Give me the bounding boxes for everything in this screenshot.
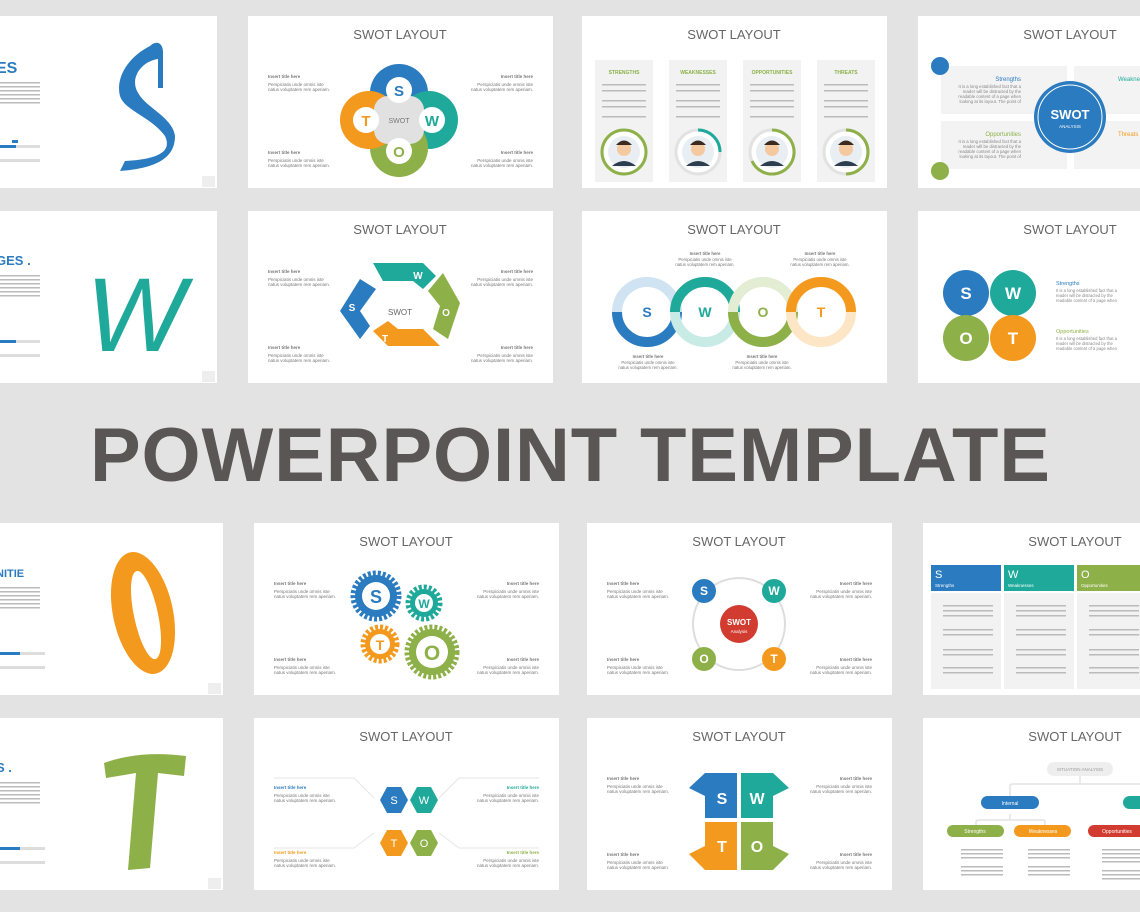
slide: four columns with avatars [582,16,887,188]
slide: hexagons: natus voluptatem rem aperiam. [274,798,336,803]
slide: wave circles: SWOT LAYOUT [687,222,781,237]
slide: W letter: W [86,257,194,374]
slide: circle with red center: S [700,584,708,598]
slide: arrow cycle: Perspiciatis unde omnis iste [477,353,533,358]
slide: hexagons: S [390,795,398,807]
slide: hexagons: natus voluptatem rem aperiam. [477,863,539,868]
slide: flower SWOT: O [393,144,405,161]
slide: SWOT analysis circle: SWOT [1050,107,1090,122]
slide: quadrant arrows: natus voluptatem rem aperiam. [607,865,669,870]
slide: four columns with avatars: SWOT LAYOUT [687,27,781,42]
slide: 2x2 circles: Strengths [1056,281,1080,287]
slide: flower SWOT: natus voluptatem rem aperiam. [268,163,330,168]
slide: flower SWOT: Perspiciatis unde omnis iste [477,82,533,87]
slide: SWOT analysis circle: reader will be distracted by the [963,144,1022,149]
slide: circle with red center: Insert title here [607,581,640,586]
slide: circle with red center: Perspiciatis unde omnis iste [816,665,872,670]
slide: circle with red center: SWOT LAYOUT [692,534,786,549]
slide: wave circles: W [698,304,712,320]
slide: org chart: Weaknesses [1029,829,1058,835]
slide: SWO table: W [1008,569,1019,581]
slide: four columns with avatars: THREATS [834,70,858,76]
slide: quadrant arrows: Insert title here [607,776,640,781]
slide: hexagons: Insert title here [507,850,539,855]
slide: 2x2 circles: O [959,329,973,348]
slide: circle with red center: Perspiciatis unde omnis iste [607,589,663,594]
slide: SWOT analysis circle: It is a long established fact that a [958,139,1022,144]
slide: circle with red center: Insert title here [607,657,640,662]
slide: arrow cycle: natus voluptatem rem aperiam. [268,282,330,287]
slide: circle with red center: T [770,652,778,666]
slide: wave circles: O [758,304,769,320]
slide: org chart: Strengths [964,829,986,835]
slide: quadrant arrows: Insert title here [840,776,872,781]
slide: gears: Perspiciatis unde omnis iste [483,665,539,670]
slide: wave circles: Perspiciatis unde omnis iste [793,257,847,262]
slide: arrow cycle: W [413,271,423,282]
slide: quadrant arrows: Perspiciatis unde omnis iste [816,784,872,789]
slide: arrow cycle: Perspiciatis unde omnis iste [268,353,324,358]
slide: arrow cycle: natus voluptatem rem aperiam. [471,358,533,363]
slide: 2x2 circles [918,211,1140,383]
slide: arrow cycle: O [442,308,450,319]
slide: SWOT analysis circle: looking at its layout. The point of [959,99,1022,104]
slide: wave circles: Perspiciatis unde omnis iste [678,257,732,262]
slide: 2x2 circles: SWOT LAYOUT [1023,222,1117,237]
slide: 2x2 circles: reader will be distracted by the [1056,341,1113,346]
slide: circle with red center: Insert title here [840,581,872,586]
slide: flower SWOT: T [361,113,371,130]
slide: hexagons: T [391,838,398,850]
slide: gears: Perspiciatis unde omnis iste [274,589,330,594]
slide: 2x2 circles: It is a long established fact that a [1056,336,1118,341]
slide: org chart: SITUATION ANALYSIS [1057,767,1103,772]
slide: 2x2 circles: S [960,284,972,303]
slide: 2x2 circles: W [1005,284,1022,303]
slide: four columns with avatars: WEAKNESSES [680,70,716,76]
slide: circle with red center: Perspiciatis unde omnis iste [816,589,872,594]
slide: quadrant arrows: Perspiciatis unde omnis iste [607,860,663,865]
slide: SWOT analysis circle: readable content of a page when [958,94,1022,99]
slide: SWOT analysis circle: readable content of a page when [958,149,1022,154]
slide: gears: Insert title here [274,657,307,662]
slide: hexagons: Insert title here [274,785,307,790]
slide: arrow cycle: SWOT [388,308,412,317]
slide: 2x2 circles: It is a long established fact that a [1056,288,1118,293]
slide: SWO table: SWOT LAYOUT [1028,534,1122,549]
slide: quadrant arrows: Insert title here [607,852,640,857]
slide: wave circles: S [642,304,652,320]
slide: circle with red center: O [699,652,709,666]
slide: wave circles: Perspiciatis unde omnis iste [735,360,789,365]
slide: wave circles: natus voluptatem rem aperiam. [790,262,850,267]
slide: gears: natus voluptatem rem aperiam. [477,670,539,675]
slide: circle with red center: Analysis [731,629,748,634]
slide: hexagons: Perspiciatis unde omnis iste [274,793,330,798]
slide: hexagons: natus voluptatem rem aperiam. [477,798,539,803]
slide: circle with red center [587,523,892,695]
slide: flower SWOT: S [394,83,404,100]
slide: flower SWOT: Insert title here [268,74,301,79]
slide: flower SWOT: Perspiciatis unde omnis iste [268,158,324,163]
slide: quadrant arrows: Perspiciatis unde omnis iste [816,860,872,865]
slide: wave circles: Insert title here [747,354,778,359]
slide: SWO table: S [935,569,942,581]
slide: SWOT analysis circle: SWOT LAYOUT [1023,27,1117,42]
slide: hexagons: Perspiciatis unde omnis iste [483,858,539,863]
slide: quadrant arrows: Insert title here [840,852,872,857]
slide: arrow cycle: Insert title here [501,269,533,274]
slide: circle with red center: W [768,584,780,598]
slide: four columns with avatars: STRENGTHS [609,70,640,76]
slide: arrow cycle: Perspiciatis unde omnis iste [477,277,533,282]
slide: SWO table [923,523,1140,695]
slide: org chart: SWOT LAYOUT [1028,729,1122,744]
slide: wave circles: Insert title here [633,354,664,359]
slide: SWO table: Opportunities [1081,583,1109,588]
slide: gears: natus voluptatem rem aperiam. [274,670,336,675]
slide: SWOT analysis circle: ANALYSIS [1059,124,1081,129]
slide: circle with red center: natus voluptatem rem aperiam. [607,594,669,599]
slide: gears: natus voluptatem rem aperiam. [477,594,539,599]
slide: flower SWOT: Perspiciatis unde omnis iste [268,82,324,87]
slide: flower SWOT: Perspiciatis unde omnis iste [477,158,533,163]
slide: arrow cycle: Insert title here [501,345,533,350]
slide: flower SWOT [248,16,553,188]
slide: gears: Insert title here [507,581,539,586]
slide: flower SWOT: SWOT [388,118,410,125]
slide: flower SWOT: W [425,113,440,130]
slide: quadrant arrows: T [717,839,727,856]
slide: circle with red center: SWOT [727,618,751,627]
slide: quadrant arrows: S [717,791,728,808]
slide: circle with red center: Perspiciatis unde omnis iste [607,665,663,670]
slide: quadrant arrows [587,718,892,890]
slide: hexagons: Perspiciatis unde omnis iste [483,793,539,798]
slide: hexagons: Perspiciatis unde omnis iste [274,858,330,863]
slide: arrow cycle: S [349,303,356,314]
slide: SWO table: O [1081,569,1090,581]
slide: flower SWOT: SWOT LAYOUT [353,27,447,42]
slide: quadrant arrows: natus voluptatem rem aperiam. [810,789,872,794]
slide: SWOT analysis circle: Opportunities [985,132,1021,138]
slide: arrow cycle: Insert title here [268,345,301,350]
slide: wave circles: natus voluptatem rem aperiam. [732,365,792,370]
slide: gears: S [370,587,382,607]
slide: 2x2 circles: T [1008,329,1019,348]
slide: gears [254,523,559,695]
slide: SWOT analysis circle: reader will be distracted by the [963,89,1022,94]
slide: wave circles: natus voluptatem rem aperiam. [618,365,678,370]
slide: quadrant arrows: SWOT LAYOUT [692,729,786,744]
slide: arrow cycle: Perspiciatis unde omnis iste [268,277,324,282]
slide: hexagons: SWOT LAYOUT [359,729,453,744]
slide: W letter [0,211,217,383]
slide: SWO table: Strengths [935,583,955,588]
slide: hexagons: Insert title here [507,785,539,790]
slide: arrow cycle: Insert title here [268,269,301,274]
slide: flower SWOT: Insert title here [501,74,533,79]
slide: gears: T [376,637,385,653]
slide: quadrant arrows: W [749,791,765,808]
slide: four columns with avatars: OPPORTUNITIES [752,70,793,76]
slide: hexagons [254,718,559,890]
slide: SWO table: Weaknesses [1008,583,1034,588]
slide: arrow cycle: SWOT LAYOUT [353,222,447,237]
slide: flower SWOT: natus voluptatem rem aperiam. [268,87,330,92]
slide: circle with red center: natus voluptatem rem aperiam. [607,670,669,675]
slide: quadrant arrows: natus voluptatem rem aperiam. [810,865,872,870]
slide: circle with red center: natus voluptatem rem aperiam. [810,670,872,675]
slide: gears: Perspiciatis unde omnis iste [483,589,539,594]
title: POWERPOINT TEMPLATE [90,413,1050,498]
slide: T letter [0,718,223,890]
slide: wave circles: Insert title here [690,251,721,256]
slide: gears: natus voluptatem rem aperiam. [274,594,336,599]
slide: org chart [923,718,1140,890]
slide: flower SWOT: Insert title here [501,150,533,155]
slide: arrow cycle: natus voluptatem rem aperiam. [471,282,533,287]
slide: flower SWOT: natus voluptatem rem aperiam. [471,87,533,92]
slide: wave circles: natus voluptatem rem aperiam. [675,262,735,267]
slide: SWOT analysis circle: Strengths [995,77,1021,83]
slide: hexagons: O [420,838,429,850]
slide: SWOT analysis circle: Threats [1118,132,1138,138]
slide: 2x2 circles: Opportunities [1056,329,1089,335]
slide: org chart: Opportunities [1102,829,1132,835]
slide: gears: W [418,597,430,611]
slide: gears: Perspiciatis unde omnis iste [274,665,330,670]
slide: wave circles [582,211,887,383]
slide: O letter [0,523,223,695]
slide: 2x2 circles: readable content of a page when [1056,346,1118,351]
slide: 2x2 circles: readable content of a page when [1056,298,1118,303]
slide: S letter [0,16,217,188]
slide: hexagons: Insert title here [274,850,307,855]
slide: wave circles: Perspiciatis unde omnis iste [621,360,675,365]
slide: quadrant arrows: natus voluptatem rem aperiam. [607,789,669,794]
slide: arrow cycle: T [382,334,388,345]
slide: gears: Insert title here [274,581,307,586]
slide: quadrant arrows: O [751,839,763,856]
slide: circle with red center: Insert title here [840,657,872,662]
slide: circle with red center: natus voluptatem rem aperiam. [810,594,872,599]
slide: gears: Insert title here [507,657,539,662]
slide: wave circles: Insert title here [805,251,836,256]
slide: 2x2 circles: reader will be distracted by the [1056,293,1113,298]
slide: SWOT analysis circle: looking at its layout. The point of [959,154,1022,159]
slide: wave circles: T [817,304,826,320]
slide: arrow cycle [248,211,553,383]
slide: quadrant arrows: Perspiciatis unde omnis iste [607,784,663,789]
slide: hexagons: natus voluptatem rem aperiam. [274,863,336,868]
slide: SWOT analysis circle [918,16,1140,188]
slide: hexagons: W [419,795,430,807]
slide: SWOT analysis circle: Weakne [1118,77,1140,83]
slide: SWOT analysis circle: It is a long established fact that a [958,84,1022,89]
slide: flower SWOT: natus voluptatem rem aperiam. [471,163,533,168]
slide: gears: SWOT LAYOUT [359,534,453,549]
slide: gears: O [424,642,440,665]
slide: flower SWOT: Insert title here [268,150,301,155]
slide: arrow cycle: natus voluptatem rem aperiam. [268,358,330,363]
slide: org chart: Internal [1002,801,1018,807]
